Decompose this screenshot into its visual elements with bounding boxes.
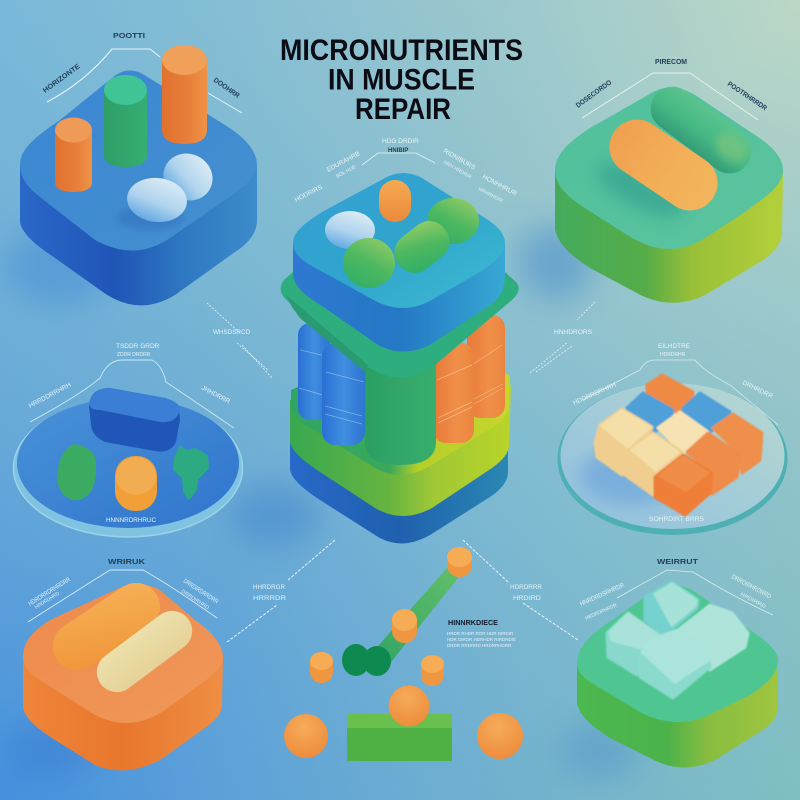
layer: green collar	[281, 272, 519, 378]
labels: HNNNRDRHRUC	[106, 517, 156, 524]
labels: WHSDSRCD	[213, 329, 250, 336]
labels: RIDNIBURS	[442, 148, 477, 172]
panel: top-left blue platform	[5, 33, 257, 305]
cylinder: central green	[365, 350, 436, 465]
nub: middle	[392, 609, 417, 643]
arrows: upper connectors	[207, 302, 595, 378]
cylinder: green	[104, 75, 147, 167]
label: DOSECORDO	[575, 79, 614, 110]
label	[575, 59, 768, 120]
labels	[294, 138, 518, 204]
panel: top-right green platform	[518, 59, 783, 303]
platform side	[555, 170, 783, 303]
bottles: blue	[298, 323, 365, 445]
layer: bottom blue base	[290, 440, 508, 544]
title: REPAIR	[355, 93, 451, 126]
label: WEIRRUT	[657, 559, 699, 566]
connector labels	[227, 540, 578, 642]
label	[579, 559, 773, 622]
sphere: left	[284, 714, 328, 758]
labels: ZDDR DRDRR	[117, 352, 151, 358]
nub: right	[421, 655, 444, 686]
platform side	[20, 165, 257, 305]
panel: bottom-centre nutrient pathway	[227, 540, 578, 761]
tiles	[607, 582, 748, 698]
labels: HRRDDRRHRH	[28, 381, 73, 410]
capsule: pale blue back	[155, 145, 221, 209]
note	[447, 620, 516, 648]
labels: EDURAHRB	[326, 150, 361, 174]
panel: right glass disk	[554, 329, 788, 535]
sphere: middle	[388, 686, 430, 726]
title	[280, 34, 523, 126]
labels: DRHRDRR	[741, 380, 774, 400]
connector labels: HDRDRRR	[510, 584, 542, 591]
layer: tray side	[290, 385, 511, 516]
capsule: orange	[599, 109, 728, 221]
labels: HDDRRBRHRH	[572, 381, 618, 407]
sphere: right	[477, 713, 523, 759]
blob: orange	[115, 456, 157, 511]
layer: top face	[293, 173, 505, 308]
title: IN MUSCLE	[328, 64, 475, 96]
label: HRDIRRD	[739, 591, 767, 610]
cylinder: tall orange	[162, 45, 207, 144]
labels: HODRIRS	[294, 184, 324, 204]
tiles	[595, 375, 762, 515]
layer: top side	[293, 243, 505, 352]
label: HDRDRRDRHRDRR	[27, 576, 72, 608]
strip: green bar	[370, 568, 458, 670]
note: HRDR RHDR ROR HDR DIRDIR	[447, 631, 514, 636]
title: MICRONUTRIENTS	[280, 34, 523, 67]
labels	[28, 329, 250, 524]
labels: SOHRDIRT BRRS	[649, 516, 705, 523]
labels: HRHRHDIR	[477, 186, 504, 204]
blob: green	[57, 444, 96, 500]
label: HRDRDRHRDR	[584, 602, 618, 622]
label	[27, 559, 219, 622]
labels: HNHDRORS	[554, 329, 593, 336]
label: DRRDIRHRD	[180, 589, 210, 611]
labels: HNIBIP	[388, 148, 408, 154]
panel: central stack	[230, 138, 519, 547]
label: POOTTI	[113, 33, 145, 40]
note: DRDR RRDRRD HRDRRHDRR	[447, 643, 512, 648]
labels: HDRDRHR	[660, 352, 686, 358]
capsule: cream	[89, 603, 200, 700]
labels: HRH HRDRIR	[442, 160, 473, 181]
bottles: orange	[433, 315, 505, 443]
label	[42, 33, 242, 113]
labels: TSDDR GRDR	[116, 343, 160, 350]
label: DOOHRR	[212, 77, 240, 100]
block: blue	[89, 388, 180, 452]
note: HINNRKDIECE	[448, 620, 498, 627]
panel: bottom-right green platform	[560, 559, 778, 778]
note: HDR DIRDR HDRHDR RIRDRDIE	[447, 637, 516, 642]
platform top	[23, 584, 223, 723]
labels: JHHDRRR	[200, 385, 231, 406]
label: HNRDRDSRHRDR	[579, 582, 626, 608]
panel: bottom-left orange platform	[5, 559, 223, 778]
label: HORIZONTE	[42, 63, 82, 95]
connector labels: HRDIRD	[513, 595, 541, 602]
label: DRRDIRDRRDRR	[182, 578, 219, 606]
capsule: orange	[44, 574, 169, 679]
platform side	[23, 657, 223, 770]
labels: HONHHRUR	[481, 174, 518, 198]
connector labels: HHRDRGR	[253, 584, 285, 591]
label: PIRECOM	[655, 59, 687, 66]
capsule: pale blue front	[125, 175, 189, 225]
platform top	[20, 70, 257, 251]
capsule: green	[642, 78, 760, 182]
label: POOTRHRRDR	[726, 81, 768, 112]
label: DRRDIRHRDRRD	[730, 574, 772, 601]
layer: tray top	[291, 340, 510, 475]
connector labels: HRRRDR	[253, 595, 286, 602]
label: HRDRDHRD	[34, 591, 61, 611]
labels: EILHDTRE	[658, 343, 691, 350]
labels	[554, 329, 778, 523]
pills on top	[325, 180, 479, 288]
block: green bar	[347, 714, 452, 761]
nub: left	[310, 652, 333, 683]
nub: top	[447, 547, 472, 577]
labels: BOL HUE	[335, 164, 358, 180]
knot: green	[342, 644, 391, 676]
blob: teal plant	[173, 445, 209, 500]
platform top	[555, 88, 783, 249]
label: WRIRUK	[108, 559, 145, 566]
labels: HDG DRDIR	[382, 138, 419, 145]
platform top	[577, 584, 778, 722]
panel: left glass disk	[14, 329, 250, 537]
platform side	[577, 660, 778, 768]
cylinder: small orange	[55, 118, 92, 192]
